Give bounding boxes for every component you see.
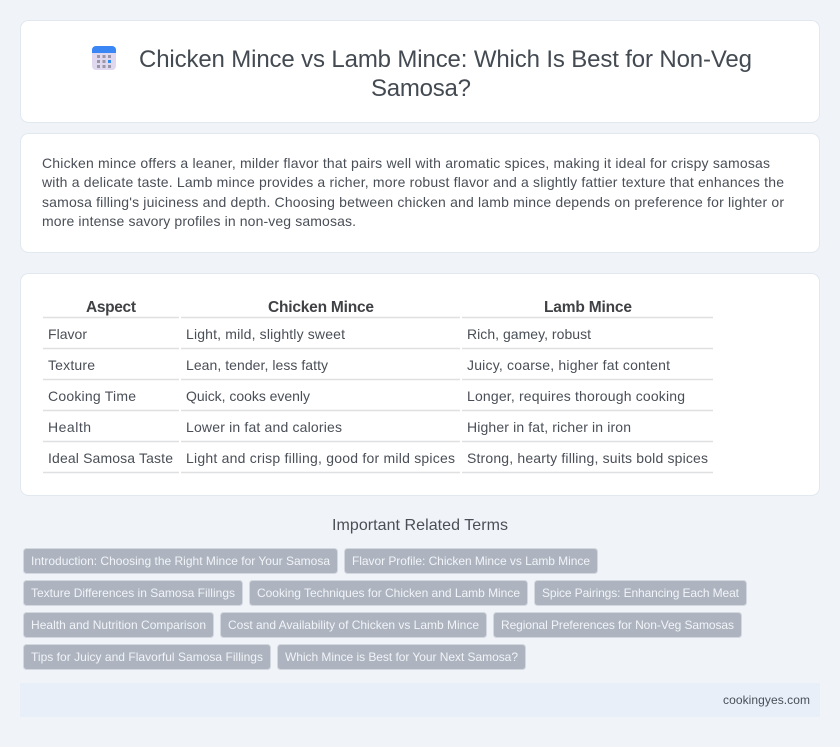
table row: health: Health [48,419,91,435]
table row: health: Higher in fat, richer in iron [467,419,631,435]
text block: introduction paragraph: more intense savory profiles in non-veg samosas. [42,213,356,229]
text block: introduction paragraph: with a delicate taste. Lamb mince provides a richer, more robust flavor and a slightly fattier texture that enhances the [41,174,784,190]
table row: health [48,419,631,435]
table row: cooking time: Cooking Time [48,388,136,404]
table row: ideal samosa taste: Strong, hearty filling, suits bold spices [467,450,708,466]
related terms tags: Cooking Techniques for Chicken and Lamb Mince [257,586,520,600]
table row: flavor: Light, mild, slightly sweet [186,326,345,342]
related terms tags: Flavor Profile: Chicken Mince vs Lamb Mince [352,554,590,568]
table row: flavor: Flavor [48,326,87,342]
footer: cookingyes.com [723,693,810,707]
icon: calendar [92,46,116,70]
related terms tags: Tips for Juicy and Flavorful Samosa Fillings [31,650,263,664]
table row: texture [48,357,670,373]
heading: important related terms: Important Related Terms [332,517,508,534]
table header row: Chicken Mince [268,299,374,316]
related terms tags [24,548,746,670]
table row: flavor: Rich, gamey, robust [467,326,591,342]
panel: comparison table [20,274,820,496]
table row: texture: Texture [48,357,95,373]
text block: introduction paragraph: Chicken mince offers a leaner, milder flavor that pairs well with aromatic spices, making it ideal for crispy samosas [42,155,770,171]
table row: ideal samosa taste: Ideal Samosa Taste [48,450,173,466]
related terms tags: Health and Nutrition Comparison [31,618,206,632]
table row: cooking time [48,388,685,404]
panel: introduction [20,134,820,252]
related terms tags: Regional Preferences for Non-Veg Samosas [501,618,734,632]
text block: introduction paragraph: samosa filling's juiciness and depth. Choosing between chicken and lamb mince depends on preference for lighter or [42,194,784,210]
table row: cooking time: Longer, requires thorough cooking [467,388,685,404]
table row: cooking time: Quick, cooks evenly [186,388,310,404]
table row: texture: Lean, tender, less fatty [186,357,328,373]
table row: ideal samosa taste: Light and crisp filling, good for mild spices [186,450,455,466]
table row: ideal samosa taste [48,450,708,466]
table header row: Aspect [86,299,136,316]
related terms tags: Cost and Availability of Chicken vs Lamb Mince [228,618,479,632]
title: Samosa? [371,75,471,102]
title: Chicken Mince vs Lamb Mince: Which Is Best for Non-Veg [139,46,752,73]
related terms tags: Texture Differences in Samosa Fillings [31,586,235,600]
table row: health: Lower in fat and calories [186,419,342,435]
table row: texture: Juicy, coarse, higher fat content [467,357,670,373]
text block: introduction paragraph [41,155,784,229]
table row: flavor [48,326,591,342]
table header row [86,299,632,316]
panel: title header [20,20,820,122]
title [139,46,752,102]
table header row: Lamb Mince [544,299,632,316]
related terms tags: Spice Pairings: Enhancing Each Meat [542,586,740,600]
related terms tags: Which Mince is Best for Your Next Samosa? [285,650,518,664]
footer [20,683,820,717]
related terms tags: Introduction: Choosing the Right Mince for Your Samosa [31,554,330,568]
